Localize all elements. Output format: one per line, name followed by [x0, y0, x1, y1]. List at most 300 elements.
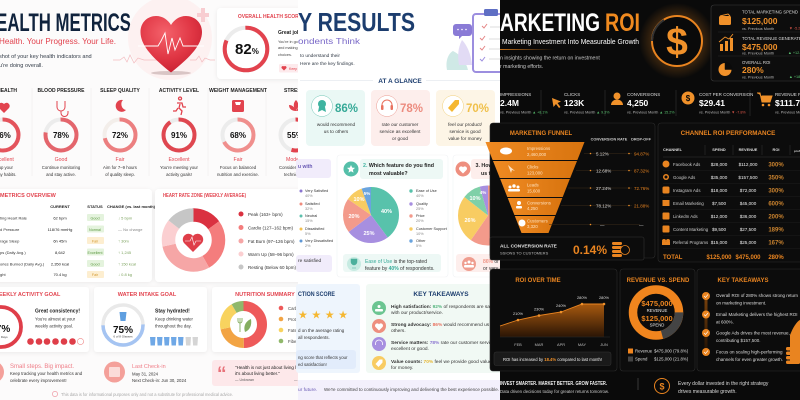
legend: heart rate zones: Fat Burn (97–126 bpm) — [248, 239, 295, 244]
funnel rates: — — [600, 222, 605, 228]
panel: key takeaways: Email Marketing delivers the highest ROI — [716, 312, 798, 317]
metric: stress level: STRESS LEVEL — [284, 88, 322, 94]
funnel labels: Leads — [527, 182, 539, 188]
question 3 partial pie: or very l — [483, 266, 501, 272]
channel total: $475,000 — [735, 255, 761, 261]
card: satisfaction score: all respondents. — [298, 335, 330, 340]
card: overall conversion rate — [490, 237, 644, 260]
panel: channel ROI: $27,500 — [740, 227, 757, 232]
funnel labels: Impressions — [527, 146, 550, 151]
funnel labels: 15,600 — [527, 188, 541, 194]
panel: metrics overview table: 2,350 kcal — [51, 262, 69, 266]
panel: ROI over time — [490, 269, 617, 371]
card: weekly activity goal: Great consistency! — [35, 308, 80, 314]
card: satisfaction score: d on the average rating — [298, 328, 345, 333]
panel: channel ROI: $18,000 — [711, 188, 728, 193]
panel: channel ROI: SPEND — [712, 147, 726, 152]
area chart — [500, 295, 610, 347]
intro text: Here are the key findings. — [300, 61, 355, 67]
pie: recommend — [473, 200, 503, 230]
metric: blood pressure: Good — [55, 157, 67, 163]
legend: feature — [409, 189, 448, 248]
area chart: FEB — [514, 342, 522, 347]
takeaway: service matters: Service matters: 78% rate our customer service as — [391, 340, 502, 346]
KPI: impressions — [500, 92, 548, 114]
footer band: ur future. — [298, 387, 317, 393]
panel: channel ROI: 167% — [768, 240, 784, 246]
question 2 feature pie: 10% — [353, 197, 365, 203]
panel: channel ROI: $12,000 — [711, 214, 728, 219]
metric: activity level: You're meeting your — [160, 165, 199, 170]
funnel labels — [527, 146, 551, 229]
card: weekly activity goal: weekly activity goal. — [35, 324, 73, 328]
panel: channel ROI: $25,000 — [740, 240, 757, 245]
panel: marketing ROI: ROI — [605, 9, 640, 37]
question 3 partial pie: 4% — [480, 190, 486, 195]
panel: channel ROI: REVENUE — [739, 147, 758, 152]
metric: blood pressure: Continue monitoring — [42, 165, 81, 170]
KPI: conversions — [611, 92, 675, 114]
KPI: cost per conversion — [682, 92, 753, 114]
card: overall health score: and making — [278, 46, 298, 50]
total spend: TOTAL MARKETING SPEND — [742, 10, 798, 14]
total spend: vs. Previous Month — [742, 27, 774, 31]
KPI: impressions: vs. Previous Month ▲ +8.1% — [500, 110, 548, 114]
area chart: 210% — [513, 311, 524, 316]
footer disclaimer: This data is for informational purposes only and not a substitute for professional medical advice. — [61, 392, 233, 397]
metric: stress level: Moderate — [286, 157, 308, 163]
subtitle: Marketing Investment Into Measurable Growth — [502, 37, 639, 46]
intro text — [300, 53, 355, 67]
metric: activity level — [159, 88, 199, 177]
ROI callout: ROI has increased by 18.4% compared to last month! — [503, 357, 602, 362]
area chart: APR — [557, 342, 565, 347]
metric: sleep quality — [100, 88, 140, 177]
callout: last check-in — [104, 362, 187, 383]
panel: channel ROI: 189% — [768, 228, 784, 234]
card: water intake goal — [94, 287, 207, 352]
callout: last check-in: Next Check-in: Jun 30, 2024 — [132, 378, 187, 383]
question 2 feature pie: 5% — [364, 191, 370, 196]
panel: metrics overview table: ght — [0, 272, 6, 277]
panel: key takeaways: on marketing investment. — [716, 300, 766, 306]
funnel labels: Customers — [527, 218, 548, 224]
question 1 partial — [296, 159, 333, 272]
panel: metrics overview table: ps (Daily Avg.) — [0, 250, 26, 255]
panel: health metrics — [0, 0, 322, 400]
metric: stress level — [279, 88, 322, 177]
funnel rates: 94.87% — [634, 152, 649, 156]
panel: heart rate zone: HEART RATE ZONE (WEEKLY AVERAGE) — [163, 193, 246, 199]
card: overall health score — [217, 8, 307, 79]
illustration: heart — [113, 0, 215, 80]
panel: key takeaways: contributing $157,500. — [716, 338, 761, 343]
panel: metrics overview table: — No change — [118, 227, 143, 232]
footer: every dollar: $ — [659, 382, 665, 392]
channel rows: LinkedIn Ads — [673, 214, 698, 219]
card: nutrition summary: Carbs — [288, 306, 299, 311]
metric: sleep quality: Aim for 7–9 hours — [103, 165, 137, 170]
question 2 feature pie — [337, 155, 448, 277]
panel: key takeaways: channels for even greater growth. — [716, 357, 783, 362]
KPI: clicks: CLICKS — [564, 92, 580, 97]
legend: satisfaction: Neutral — [305, 214, 317, 218]
card: water intake goal: 75% — [113, 325, 133, 336]
funnel rates: 5.12% — [596, 152, 609, 156]
intro text: u're doing overall. — [0, 63, 43, 69]
legend: feature: 10% — [416, 232, 424, 236]
callout: small steps — [0, 361, 83, 383]
quote card: — Unknown — [235, 378, 254, 382]
legend: satisfaction: Very Satisfied — [305, 189, 328, 193]
channel total: $125,000 — [706, 255, 732, 261]
panel: metrics overview table: ↓ 5 bpm — [118, 216, 133, 220]
icon: dollar coin: $ — [666, 21, 688, 64]
quote card — [212, 360, 309, 386]
panel: marketing funnel — [486, 123, 655, 258]
KPI: conversions: CONVERSIONS — [627, 92, 660, 97]
panel: metrics overview table: ↑ 1,245 — [118, 250, 132, 255]
panel: metrics overview table: rage Sleep — [0, 238, 20, 244]
quote card: — U — [294, 378, 301, 382]
area chart: 280% — [599, 295, 610, 300]
metric: sleep quality: Fair — [116, 157, 125, 163]
question 3 partial pie: 26% — [464, 218, 476, 224]
card: nutrition summary: NUTRITION SUMMARY — [235, 292, 295, 298]
takeaway: value counts — [372, 356, 492, 371]
panel: metrics overview table: ↑ 150 kcal — [118, 262, 136, 266]
metric: weight management — [209, 88, 267, 177]
card: water intake goal: WATER INTAKE GOAL — [118, 292, 177, 298]
takeaway: strong advocacy: others. — [391, 328, 406, 334]
metric: sleep quality: SLEEP QUALITY — [100, 88, 140, 94]
question 2 feature pie: 2. Which feature do you find — [363, 163, 434, 169]
card: nutrition summary — [212, 287, 304, 352]
legend: satisfaction: Satisfied — [305, 202, 320, 206]
legend: satisfaction: 15% — [305, 219, 313, 223]
channel total — [663, 255, 784, 261]
metric: activity level: 91% — [171, 131, 187, 140]
card: totals — [711, 5, 800, 81]
funnel labels: Conversions — [527, 200, 551, 206]
KPI strip — [500, 90, 800, 116]
stat card: value: service is good — [449, 129, 481, 134]
panel: survey results — [296, 0, 513, 400]
funnel rates: 21.88% — [634, 204, 649, 208]
callout: small steps: Keep tracking your health metrics and — [10, 371, 83, 376]
total spend: $125,000 — [742, 16, 778, 26]
callout: small steps: celebrate every improvement! — [10, 378, 67, 383]
funnel labels: 4,250 — [527, 206, 538, 211]
panel: channel ROI: $9,500 — [712, 227, 726, 232]
callout: last check-in: Last Check-in — [132, 364, 166, 370]
question 2 feature pie: 25% — [363, 231, 375, 237]
card: satisfaction score — [296, 284, 360, 373]
metric: weight management: 68% — [230, 131, 246, 140]
panel: marketing funnel: CONVERSION RATE — [591, 138, 628, 142]
footer band: We're committed to continuously improving and delivering the best experience possible. — [324, 387, 499, 393]
panel: channel ROI: ROI — [773, 147, 779, 152]
overall ROI: vs. Previous Month — [742, 76, 774, 80]
question 2 feature pie: Ease of Use is the top-rated — [365, 259, 427, 265]
total revenue — [719, 34, 800, 56]
question 1 partial: u with — [298, 164, 312, 170]
legend: satisfaction: Very Dissatisfied — [305, 239, 333, 243]
legend: feature: 25% — [416, 207, 424, 211]
panel: channel ROI: $28,000 — [711, 162, 728, 167]
funnel rates: — — [639, 222, 644, 228]
takeaway: high satisfaction: High satisfaction: 92% of respondents are satisfied — [391, 304, 503, 310]
stat card: recommend: would recommend — [317, 122, 356, 127]
illustration: clipboard — [446, 9, 505, 72]
donut: heart rate zones — [168, 215, 218, 265]
panel: key takeaways — [697, 269, 800, 371]
stat card: service: service as excellent — [380, 129, 421, 134]
panel: channel ROI: CHANNEL ROI PERFORMANCE — [681, 130, 775, 137]
panel: metrics overview table: Normal — [89, 228, 101, 232]
takeaway: strong advocacy — [372, 319, 495, 334]
footer: invest smarter: Data driven decisions today for greater returns tomorrow. — [500, 389, 609, 395]
panel: marketing funnel: DROP-OFF — [631, 138, 652, 142]
question 3 partial pie: 3. How lik — [476, 163, 500, 169]
card: key takeaways: KEY TAKEAWAYS — [413, 291, 469, 298]
channel rows: Referral Programs — [673, 240, 708, 245]
footer: invest smarter: INVEST SMARTER. MARKET BETTER. GROW FASTER. — [500, 381, 607, 387]
question 2 feature pie: 20% — [348, 214, 360, 220]
overall ROI: 280% — [742, 65, 764, 75]
panel: channel ROI — [658, 123, 800, 262]
panel: metrics overview table: ↓ 0.8 kg — [118, 272, 132, 277]
metric: blood pressure — [38, 88, 85, 177]
panel: channel ROI: 600% — [768, 202, 784, 208]
legend: feature: 20% — [416, 219, 424, 223]
card: overall health score: Keep it — [289, 67, 300, 71]
KPI: cost per conversion: $ — [686, 94, 691, 103]
footer: every dollar: drives measurable growth. — [678, 389, 737, 395]
channel rows: Instagram Ads — [673, 188, 700, 193]
card: overall conversion rate: 0.14% — [573, 243, 607, 257]
legend: revenue vs spend: $125,000 (21.8%) — [654, 356, 689, 362]
channel rows: Email Marketing — [673, 201, 704, 206]
metric: blood pressure: 78% — [53, 131, 69, 140]
panel: heart rate zone — [155, 189, 305, 282]
card: overall conversion rate: ALL CONVERSION RATE — [500, 244, 558, 250]
takeaway: value counts: Value counts: 70% feel we provide good value — [391, 359, 492, 365]
panel: marketing funnel: MARKETING FUNNEL — [510, 131, 572, 137]
takeaway: value counts: for money. — [391, 365, 413, 371]
card: nutrition summary: Protein — [288, 317, 302, 322]
metric: weight management: Focus on balanced — [220, 165, 257, 170]
panel: key takeaways: KEY TAKEAWAYS — [718, 278, 768, 284]
panel: key takeaways: at 600%. — [716, 320, 734, 324]
channel rows — [673, 162, 709, 245]
metric: weight management: nutrition and exercise. — [217, 172, 259, 177]
funnel rates: 72.76% — [634, 186, 649, 191]
question 3 partial pie: 86% of — [483, 259, 499, 265]
heading: at a glance: AT A GLANCE — [378, 78, 422, 85]
card: overall health score: You're in good — [278, 40, 302, 44]
KPI: conversions: 4,250 — [627, 98, 649, 108]
total spend — [719, 10, 800, 31]
panel: key takeaways: Focus on scaling high-performing — [716, 350, 783, 354]
panel: metrics overview table: ↑ 30m — [118, 238, 130, 244]
card: water intake goal: 6 of 8 Glasses — [113, 334, 133, 338]
KPI: cost per conversion: COST PER CONVERSION — [699, 92, 753, 97]
legend: feature: 40% — [416, 194, 424, 198]
stat card: service: or good — [392, 136, 408, 141]
area chart: 240% — [556, 303, 567, 308]
takeaway: service matters: excellent or good. — [391, 346, 429, 352]
card: water intake goal: throughout the day. — [155, 324, 192, 328]
funnel rates — [549, 152, 649, 228]
panel: marketing ROI — [486, 0, 800, 400]
overall ROI — [718, 60, 800, 80]
metric: blood pressure: BLOOD PRESSURE — [38, 88, 85, 94]
card: overall health score: choices. — [278, 53, 292, 57]
panel: ROI over time: ROI OVER TIME — [515, 278, 561, 284]
panel: channel ROI: $35,000 — [711, 175, 728, 180]
metric: stress level: 55% — [287, 131, 303, 140]
legend: revenue vs spend: $475,000 (79.8%) — [654, 348, 689, 354]
panel: channel ROI: $36,000 — [740, 214, 757, 219]
takeaway: strong advocacy: Strong advocacy: 86% would recommend us to — [391, 322, 495, 328]
subtitle: Health. Your Progress. Your Life. — [0, 36, 116, 46]
area chart: 280% — [577, 295, 588, 300]
quote card: “ — [217, 364, 226, 385]
legend: feature: Customer Support — [416, 227, 448, 231]
panel: revenue vs spend: SPEND — [650, 322, 664, 328]
panel: revenue vs spend: REVENUE VS. SPEND — [627, 278, 690, 284]
legend: feature: Other — [416, 239, 426, 243]
legend: revenue vs spend — [628, 348, 689, 362]
legend: heart rate zones — [238, 212, 297, 270]
footer band — [298, 380, 500, 400]
funnel rates: 78.12% — [596, 204, 611, 208]
stat card: recommend: 86% — [335, 103, 358, 115]
KPI: clicks: 123K — [564, 98, 585, 108]
card: satisfaction score: ng score that reflects your — [298, 355, 348, 360]
legend: satisfaction — [300, 189, 333, 248]
overall ROI: OVERALL ROI — [742, 60, 770, 65]
panel: channel ROI: CHANNEL — [663, 147, 683, 152]
metric: activity level: activity goals! — [166, 172, 192, 177]
takeaway: high satisfaction: with our product/service. — [391, 310, 443, 316]
KPI: revenue per conversion — [757, 92, 800, 114]
card: overall conversion rate: SSIONS TO CUSTOMERS — [500, 250, 549, 256]
panel: metrics overview table — [0, 189, 156, 282]
panel: channel ROI: 300% — [768, 188, 784, 194]
legend: satisfaction: 32% — [305, 207, 313, 211]
question 3 partial pie — [453, 155, 513, 277]
KPI: impressions: IMPRESSIONS — [500, 92, 531, 97]
channel icons — [662, 160, 670, 245]
metric: stress level: Consider relaxation — [279, 165, 317, 170]
intro text: r marketing efforts. — [500, 64, 543, 70]
panel: metrics overview table: Fair — [92, 273, 99, 277]
legend: heart rate zones: Peak (163+ bpm) — [248, 212, 283, 217]
panel: metrics overview table: METRICS OVERVIEW — [0, 193, 57, 199]
footer: every dollar: Every dollar invested in the right strategy — [678, 381, 769, 387]
card: overall health score: Great job! — [278, 30, 302, 36]
panel: channel ROI: 300% — [768, 162, 784, 168]
icon: coins and hand — [786, 319, 800, 364]
channel total: TOTAL — [663, 255, 683, 261]
area chart: MAY — [578, 342, 586, 347]
panel: key takeaways: Overall ROI of 280% shows strong return — [716, 293, 799, 298]
legend: revenue vs spend: Spend — [635, 356, 648, 362]
KPI: clicks: vs. Previous Month ▲ 9.3% — [564, 110, 610, 114]
metric: activity level: ACTIVITY LEVEL — [159, 88, 199, 94]
area chart: MAR — [535, 342, 544, 347]
card: satisfaction score: ed satisfaction! — [298, 362, 327, 367]
funnel labels: 2,460,000 — [527, 152, 547, 157]
panel: metrics overview table: CURRENT — [50, 204, 70, 209]
metric columns — [0, 88, 322, 177]
card: nutrition summary: Fiber — [288, 339, 298, 344]
panel: channel ROI: 200% — [768, 214, 784, 220]
panel: channel ROI: $45,000 — [740, 201, 757, 206]
card: weekly activity goal: You're almost at your — [35, 316, 76, 322]
legend: heart rate zones: Cardio (127–162 bpm) — [248, 226, 294, 230]
panel: channel ROI: $15,000 — [711, 240, 728, 245]
legend: feature: Quality — [416, 202, 428, 206]
card: overall health score: 82% — [235, 41, 259, 58]
channel rows: Facebook Ads — [673, 162, 700, 167]
legend: heart rate zones: Warm Up (58–96 bpm) — [248, 252, 294, 257]
funnel labels: 123,000 — [527, 170, 543, 176]
total revenue: $475,000 — [742, 42, 778, 52]
channel total: 280% — [768, 255, 784, 261]
legend: satisfaction: 2% — [305, 244, 311, 248]
panel: revenue vs spend: $475,000 — [641, 299, 673, 308]
panel: metrics overview table: 70.4 kg — [53, 272, 67, 277]
panel: channel ROI: $7,500 — [712, 201, 726, 206]
panel: channel ROI: $72,000 — [740, 188, 757, 193]
metric: weight management: WEIGHT MANAGEMENT — [209, 88, 267, 94]
intro text: n insights showing the return on investment — [500, 56, 600, 62]
stat card: value: value for money — [448, 136, 482, 141]
legend: feature: Price — [416, 214, 425, 218]
card: satisfaction score: CTION SCORE — [298, 291, 336, 298]
panel: metrics overview table: ories Burned (Daily Avg.) — [0, 262, 45, 266]
title: marketing ROI: ARKETING — [500, 9, 600, 37]
pie: valuable feature — [357, 201, 385, 229]
callout: last check-in: May 31, 2024 — [132, 372, 159, 376]
panel: metrics overview table: 118/76 mmHg — [48, 227, 72, 232]
stat card: service — [371, 90, 430, 146]
KPI: clicks — [552, 92, 610, 114]
panel: metrics overview table: 8,642 — [55, 250, 66, 255]
funnel labels: Clicks — [527, 164, 538, 170]
intro text: to understand their — [300, 53, 340, 59]
intro text — [500, 56, 600, 70]
question 1 partial: re satisfied — [298, 258, 322, 264]
title: survey results: Y RESULTS — [298, 7, 415, 37]
metric: sleep quality: 72% — [112, 131, 128, 140]
question 3 partial pie: 10% — [469, 196, 481, 202]
legend: satisfaction: 40% — [305, 194, 313, 198]
funnel rates: 12.68% — [596, 168, 611, 174]
funnel labels: 3,320 — [527, 224, 538, 229]
metric: weight management: Fair — [234, 157, 243, 163]
quote card: it's about living better." — [235, 371, 280, 376]
stat card: value: feel our product/ — [448, 122, 483, 127]
card: nutrition summary: Fats — [288, 328, 296, 333]
panel: metrics overview table: ting Heart Rate — [0, 216, 28, 220]
takeaway: high satisfaction — [372, 301, 503, 316]
icon: dollar coin — [639, 3, 715, 79]
stat card: value: 70% — [466, 103, 489, 115]
